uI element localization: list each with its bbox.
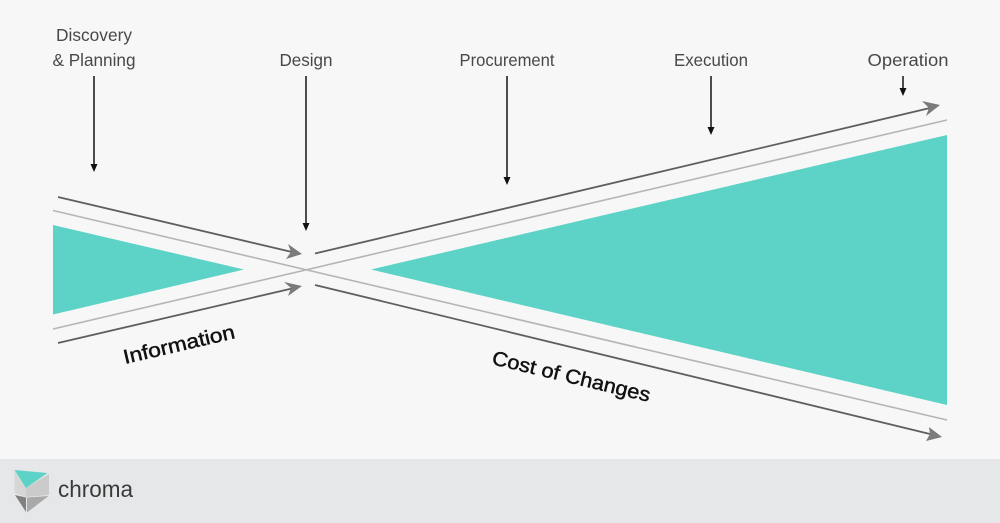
logo wordmark: chroma bbox=[58, 476, 133, 502]
label: Design: Design bbox=[280, 50, 332, 70]
down arrow: Discovery bbox=[90, 76, 98, 172]
logo: chroma bbox=[14, 470, 133, 512]
footer band bbox=[0, 459, 1000, 523]
icon: prism mark bbox=[14, 470, 49, 512]
arrow: upper left, converging bbox=[58, 197, 302, 259]
arrow: information rising to the right bbox=[315, 101, 940, 254]
label: Information: Information bbox=[121, 321, 237, 369]
right teal triangle: cost of changes bbox=[371, 135, 947, 405]
left teal triangle: information bbox=[53, 225, 244, 314]
label: Procurement: Procurement bbox=[460, 50, 555, 70]
label: Execution: Execution bbox=[674, 50, 748, 70]
down arrow: Execution bbox=[708, 76, 714, 135]
arrow: lower left, converging bbox=[58, 282, 302, 343]
label: Discovery & Planning: & Planning bbox=[52, 50, 136, 70]
arrow: cost falling to the right bbox=[315, 285, 942, 441]
label: Cost of Changes: Cost of Changes bbox=[490, 347, 652, 407]
gray crossing lines bbox=[53, 120, 947, 420]
label: Discovery & Planning bbox=[52, 25, 136, 70]
down arrow: Operation bbox=[900, 76, 906, 96]
down arrow: Design bbox=[302, 76, 310, 231]
label: Operation: Operation bbox=[868, 50, 948, 70]
down arrow: Procurement bbox=[504, 76, 510, 185]
label: Discovery & Planning: Discovery bbox=[56, 25, 132, 45]
